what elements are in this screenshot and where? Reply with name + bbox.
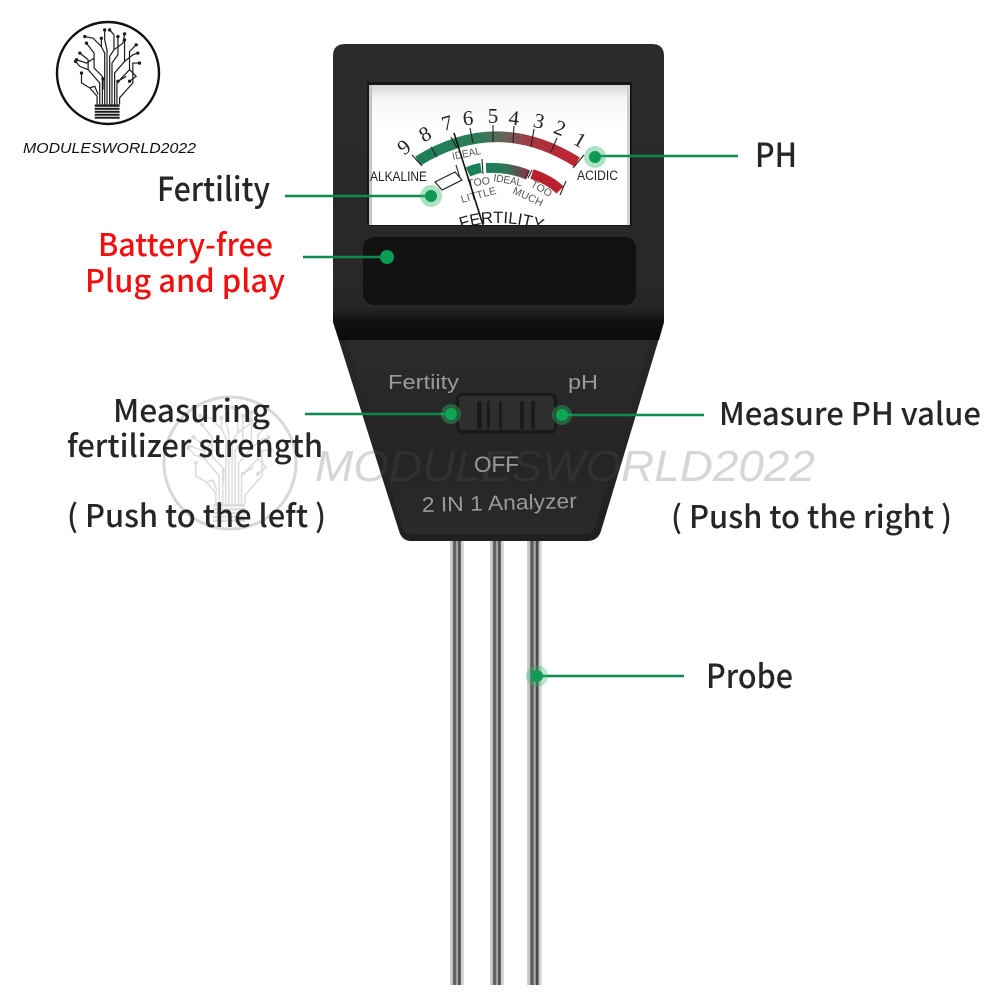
callout: Measuring fertilizer strength <box>67 386 461 536</box>
switch labels: OFF <box>474 452 519 477</box>
callout: Probe: Probe <box>706 650 793 698</box>
gauge: pH scale arc: 1 <box>569 127 591 153</box>
switch labels: 2 IN 1 Analyzer <box>422 490 577 517</box>
gauge labels: IDEAL <box>451 145 482 163</box>
callout: Measure PH value: ( Push to the right ) <box>671 492 952 537</box>
gauge: pH scale arc: 8 <box>415 121 435 147</box>
gauge: pH scale arc <box>392 104 591 168</box>
meter window <box>367 82 632 226</box>
gauge: pH scale arc: 4 <box>508 106 521 131</box>
gauge: pH scale arc: 2 <box>551 115 569 141</box>
gauge: pH scale arc: 5 <box>488 104 498 128</box>
probes <box>450 535 542 985</box>
callout: Measure PH value <box>552 389 981 537</box>
callout: Battery-free: Battery-free <box>98 220 273 265</box>
callout: Measuring fertilizer strength: Measuring <box>113 386 270 431</box>
callout: Battery-free: Plug and play <box>85 256 285 301</box>
switch labels: Fertiity <box>388 372 459 394</box>
switch labels <box>388 372 598 517</box>
gauge labels: IDEAL <box>492 172 523 189</box>
callout: Measure PH value: Measure PH value <box>719 389 981 434</box>
callout: PH: PH <box>755 129 797 177</box>
watermark over body: MODULESWORLD2022 <box>315 442 815 491</box>
gauge: fertility scale arc <box>435 159 566 195</box>
callout: Battery-free <box>85 220 394 301</box>
gauge: pH scale arc: 9 <box>392 134 416 160</box>
callout: Fertility: Fertility <box>157 163 270 211</box>
meter body <box>333 44 664 541</box>
gauge labels: TOO <box>467 175 491 190</box>
logo: circuit tree badge <box>57 22 159 124</box>
gauge labels: LITTLE <box>460 185 498 206</box>
gauge labels: FERTILITY <box>459 212 545 225</box>
gauge labels: ALKALINE <box>370 168 427 184</box>
gauge needle <box>454 133 483 225</box>
gauge labels: TOO <box>528 178 554 200</box>
callout: Probe <box>526 650 793 698</box>
gauge: pH scale arc: 7 <box>439 110 455 136</box>
dark solar panel <box>363 237 636 305</box>
switch labels: pH <box>568 372 598 394</box>
brand name: MODULESWORLD2022 <box>23 141 196 157</box>
callout: Fertility <box>157 163 442 211</box>
watermark emblem <box>164 397 296 529</box>
dark shoulder band <box>333 306 664 340</box>
gauge labels <box>370 145 618 225</box>
callout: PH <box>584 129 797 177</box>
callout: Measuring fertilizer strength: fertilizer strength <box>67 421 323 466</box>
lower switch plate <box>347 340 651 534</box>
gauge labels: MUCH <box>511 185 545 209</box>
slide switch <box>456 393 557 434</box>
gauge: pH scale arc: 3 <box>531 108 547 134</box>
watermark text: MODULESWORLD2022 <box>315 442 815 491</box>
gauge labels: ACIDIC <box>577 168 618 183</box>
callout: Measuring fertilizer strength: ( Push to the left ) <box>67 491 326 536</box>
gauge: pH scale arc: 6 <box>462 106 474 130</box>
